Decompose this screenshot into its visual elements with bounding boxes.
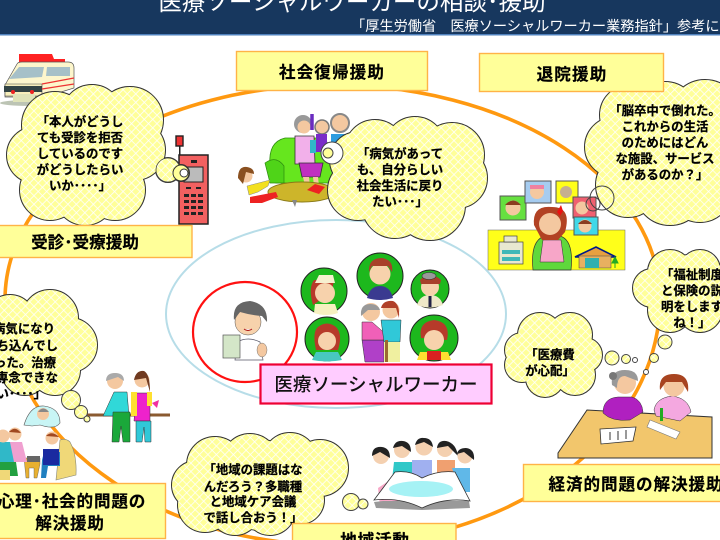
- thought cloud: return to society: たい･･･」: [372, 195, 428, 209]
- icon: woman with care facilities: [488, 181, 625, 270]
- label: psychological and social problem support: 心理･社会的問題の: [0, 492, 146, 511]
- thought cloud: refusing consultation: がどうしたらい: [37, 162, 123, 177]
- thought cloud: return to society: 社会生活に戻り: [357, 178, 443, 193]
- label: medical social worker: [260, 364, 492, 404]
- label: discharge support: 退院援助: [537, 65, 607, 84]
- label: discharge support: [480, 54, 664, 92]
- thought cloud: discharge concern: のためにはどん: [622, 135, 708, 150]
- thought cloud: community issues: で話し合おう！」: [203, 510, 303, 525]
- label: consultation and treatment support: [0, 226, 192, 258]
- label: community activities: [292, 524, 456, 540]
- thought cloud: refusing consultation: 「本人がどうし: [37, 114, 123, 129]
- thought cloud: discharge concern: があるのか？」: [622, 167, 708, 182]
- label: economic problem support: 経済的問題の解決援助: [549, 475, 720, 494]
- thought cloud: discharge concern: [585, 80, 720, 225]
- icon: nurse in green circle: [301, 268, 347, 315]
- icon: care worker supporting elder: [361, 301, 401, 362]
- thought cloud: medical cost worry: [505, 313, 638, 397]
- thought cloud: refusing consultation: [7, 85, 189, 225]
- thought cloud: refusing consultation: ても受診を拒否: [37, 130, 124, 145]
- thought cloud: community issues: 「地域の課題はな: [203, 462, 303, 477]
- thought cloud: refusing consultation: いか････」: [49, 179, 111, 193]
- icon: mobile phone: [176, 136, 208, 224]
- header band: [0, 0, 720, 36]
- thought cloud: return to society: [321, 117, 487, 240]
- icon: family on sofa: [238, 114, 349, 207]
- icon: medical social worker portrait in red circle: [193, 282, 297, 382]
- icon: community group behind open book: [372, 438, 474, 510]
- icon: man in suit in green circle: [357, 253, 403, 300]
- thought cloud: discharge concern: これからの生活: [622, 119, 708, 134]
- icon: rehabilitation handrail scene: [87, 371, 170, 442]
- subtitle: 「厚生労働省 医療ソーシャルワーカー業務指針」参考に: [351, 18, 720, 35]
- label: social reintegration support: 社会復帰援助: [279, 62, 385, 82]
- thought cloud: medical cost worry: 「医療費: [525, 347, 575, 362]
- label: medical social worker: 医療ソーシャルワーカー: [274, 374, 478, 395]
- icon: woman in apron in green circle: [410, 315, 458, 361]
- icon: ambulance: [0, 54, 74, 106]
- thought cloud: welfare explanation: ね！」: [673, 316, 711, 330]
- label: psychological and social problem support: [0, 484, 166, 538]
- thought cloud: community issues: と地域ケア会議: [210, 494, 297, 509]
- label: social reintegration support: [236, 52, 428, 90]
- orange cycle ellipse: [5, 85, 660, 540]
- thought cloud: medical cost worry: が心配」: [525, 363, 575, 378]
- label: psychological and social problem support: 解決援助: [35, 514, 105, 533]
- label: economic problem support: [524, 464, 720, 502]
- thought cloud: welfare explanation: [633, 250, 720, 374]
- thought cloud: community issues: んだろう？多職種: [204, 479, 303, 494]
- thought cloud: discharge concern: な施設、サービス: [615, 151, 715, 166]
- icon: family talking with consultant: [0, 406, 76, 480]
- thought cloud: discharge concern: 「脳卒中で倒れた。: [609, 103, 720, 118]
- blue central ellipse: [166, 220, 506, 408]
- thought cloud: depressed by illness: [0, 290, 97, 422]
- icon: doctor in green circle: [411, 270, 449, 308]
- thought cloud: refusing consultation: しているのです: [37, 147, 123, 161]
- thought cloud: community issues: [172, 433, 368, 535]
- thought cloud: return to society: も、自分らしい: [357, 162, 443, 177]
- label: consultation and treatment support: 受診･受療援助: [31, 233, 139, 252]
- icon: girl in green circle: [305, 317, 349, 362]
- icon: elder and daughter at consultation desk: [558, 370, 712, 458]
- thought cloud: return to society: 「病気があって: [357, 146, 443, 161]
